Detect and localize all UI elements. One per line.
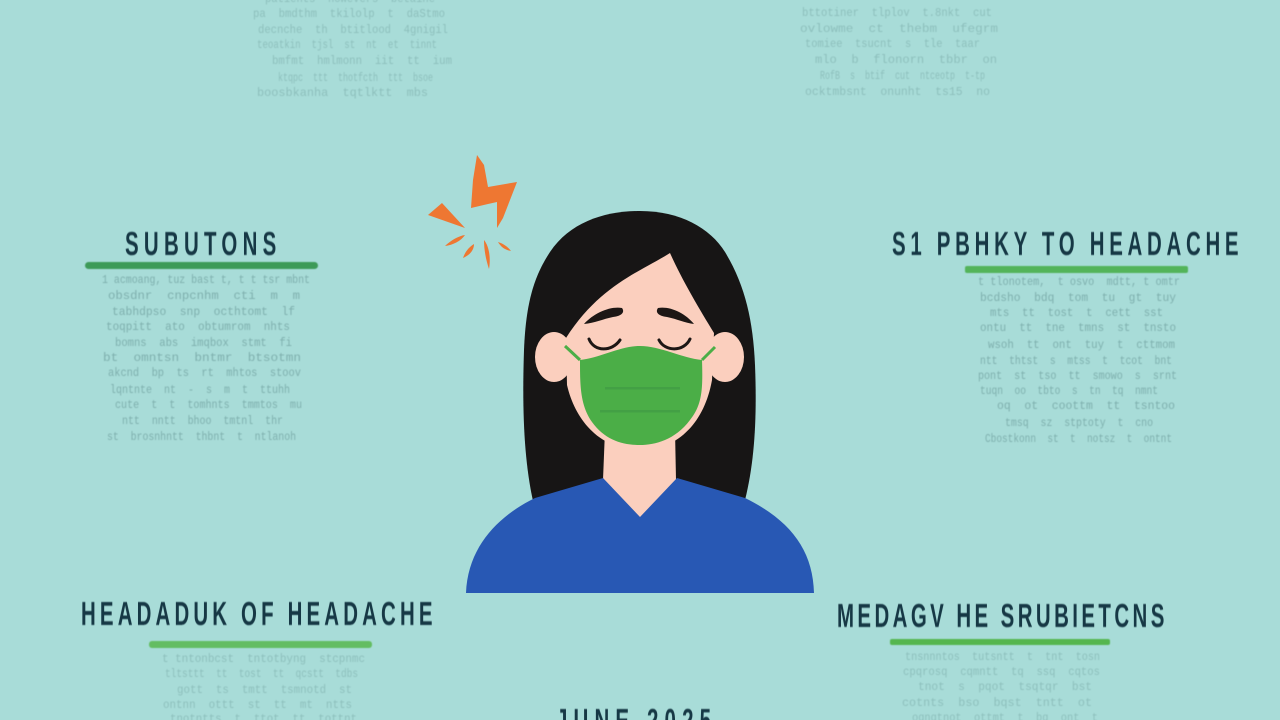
illustration: woman with mask: [466, 211, 814, 593]
text block: top right: ocktmbsnt onunht ts15 no: [805, 85, 990, 99]
neck: [603, 430, 676, 518]
body text: right panel: wsoh tt ont tuy t cttmom: [988, 338, 1175, 352]
icon: pain burst: [428, 155, 517, 269]
ear left: [535, 332, 573, 382]
text block: top left: teoatkin tjsl st nt et tinnt: [257, 38, 437, 52]
body text: bottom right panel: tnsnnntos tutsntt t tnt tosn: [905, 650, 1100, 664]
body text: bottom right panel: tnot s pqot tsqtqr bst: [918, 680, 1092, 694]
body text: bottom left panel: ontnn ottt st tt mt ntts: [163, 698, 352, 712]
body text: left panel: tabhdpso snp octhtomt lf: [112, 305, 295, 319]
body text: left panel: toqpitt ato obtumrom nhts: [106, 320, 290, 334]
body text: bottom left panel: [162, 652, 365, 720]
body text: left panel: bt omntsn bntmr btsotmn: [103, 351, 301, 365]
panel: symptoms (left): [85, 225, 318, 444]
body text: right panel: [978, 275, 1180, 446]
text block: top right: [800, 6, 998, 99]
body text: right panel: t tlonotem, t osvo mdtt, t omtr: [978, 275, 1180, 289]
body text: right panel: ntt thtst s mtss t tcot bnt: [980, 354, 1172, 368]
body text: left panel: akcnd bp ts rt mhtos stoov: [108, 366, 301, 380]
text block: top right: bttotiner tlplov t.8nkt cut: [802, 6, 992, 20]
heading underline: left panel: [85, 262, 318, 269]
body text: bottom left panel: tltsttt tt tost tt qcstt tdbs: [165, 667, 358, 681]
body text: left panel: [102, 273, 310, 444]
text block: top left: bmfmt hmlmonn iit tt ium: [272, 54, 452, 68]
heading underline: right panel: [965, 266, 1188, 273]
eyebrow left: [584, 308, 623, 324]
text block: top left: ktqpc ttt thotfcth ttt bsoe: [278, 71, 433, 85]
body text: left panel: obsdnr cnpcnhm cti m m: [108, 289, 300, 303]
text block: top left: boosbkanha tqtlktt mbs: [257, 86, 428, 100]
body text: right panel: ontu tt tne tmns st tnsto: [980, 321, 1176, 335]
body text: left panel: ntt nntt bhoo tmtnl thr: [122, 414, 283, 428]
heading underline: bottom left panel: [149, 641, 372, 648]
panel: study to headache (right): [892, 225, 1239, 446]
eye right: [659, 339, 690, 349]
text block: top right: tomiee tsucnt s tle taar: [805, 37, 980, 51]
heading: bottom right panel: MEDAGV HE SRUBIETCNS: [837, 597, 1164, 634]
mask: [565, 346, 715, 445]
body text: bottom right panel: cotnts bso bqst tntt ot: [902, 696, 1092, 710]
body text: right panel: oq ot coottm tt tsntoo: [997, 399, 1175, 413]
body text: right panel: mts tt tost t cett sst: [990, 306, 1163, 320]
eye left: [589, 339, 620, 349]
body text: right panel: pont st tso tt smowo s srnt: [978, 369, 1177, 383]
panel: headache bottom left: [81, 595, 433, 720]
text block: top left: [253, 0, 452, 100]
body text: left panel: 1 acmoang, tuz bast t, t t tsr mbnt: [102, 273, 310, 287]
face: [566, 253, 714, 450]
text block: top left: decnche th btitlood 4gnigil: [258, 23, 448, 37]
heading: bottom left panel: HEADADUK OF HEADACHE: [81, 595, 433, 632]
ear right: [706, 332, 744, 382]
body text: bottom right panel: cpqrosq cqmntt tq ssq cqtos: [903, 665, 1100, 679]
heading: right panel: S1 PBHKY TO HEADACHE: [892, 225, 1239, 262]
text block: top right: mlo b flonorn tbbr on: [815, 53, 997, 67]
body text: left panel: bomns abs imqbox stmt fi: [115, 336, 292, 350]
panel: medical bottom right: [837, 597, 1164, 720]
heading underline: bottom right panel: [890, 639, 1110, 645]
body text: left panel: st brosnhntt thbnt t ntlanoh: [107, 430, 296, 444]
body text: bottom left panel: gott ts tmtt tsmnotd st: [177, 683, 352, 697]
body text: right panel: tuqn oo tbto s tn tq nmnt: [980, 384, 1158, 398]
body text: left panel: cute t t tomhnts tmmtos mu: [115, 398, 302, 412]
text block: top left: pa bmdthm tkilolp t daStmo: [253, 7, 445, 21]
text block: top right: RofB s btif cut ntceotp t-tp: [820, 69, 985, 83]
body text: right panel: bcdsho bdq tom tu gt tuy: [980, 291, 1176, 305]
body text: bottom right panel: [902, 650, 1100, 720]
shirt: [466, 478, 814, 593]
heading: left panel: SUBUTONS: [125, 225, 276, 262]
text block: top right: ovlowme ct thebm ufegrm: [800, 22, 998, 36]
body text: bottom left panel: t tntonbcst tntotbyng stcpnmc: [162, 652, 365, 666]
body text: right panel: Cbostkonn st t notsz t ontnt: [985, 432, 1172, 446]
hair: [523, 211, 756, 501]
body text: right panel: tmsq sz stptoty t cno: [1005, 416, 1153, 430]
body text: left panel: lqntnte nt - s m t ttuhh: [110, 383, 290, 397]
eyebrow right: [657, 308, 694, 324]
